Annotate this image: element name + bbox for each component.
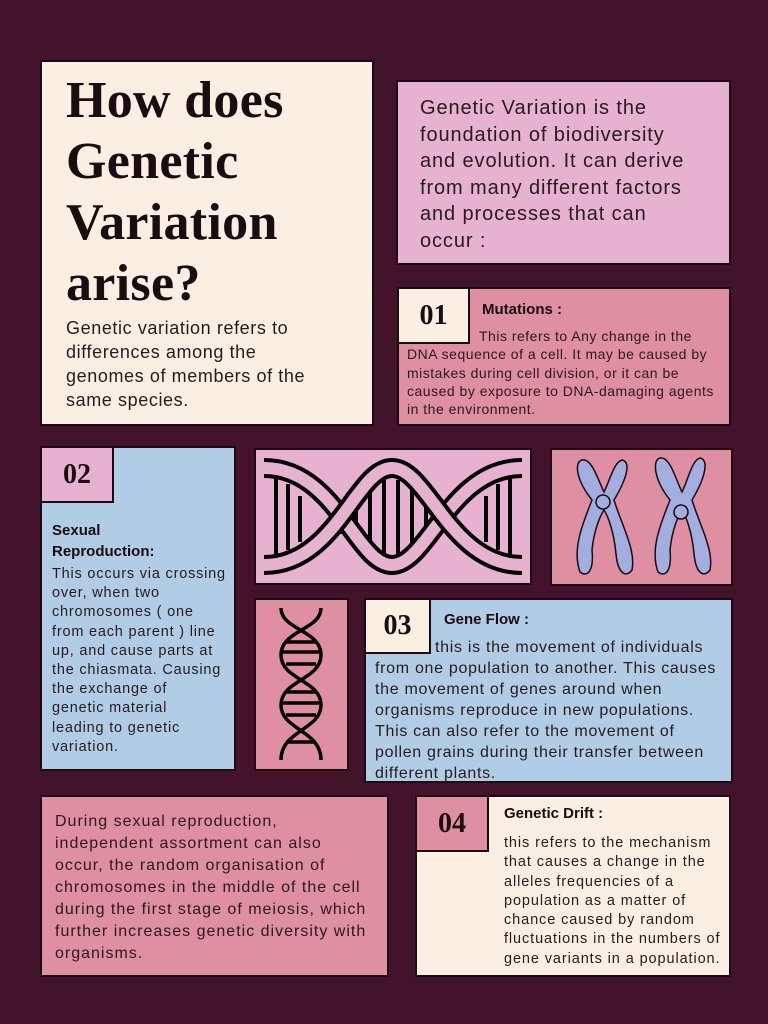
text: genetic drift: population as a matter of [504, 893, 686, 909]
number 02: 02 [63, 458, 91, 490]
panel: intro: occur : [420, 230, 486, 252]
definition text [66, 318, 305, 410]
panel: 01 mutations [397, 287, 731, 426]
number 03: 03 [384, 610, 412, 641]
text: sexual reproduction: This occurs via crossing [52, 566, 226, 582]
text: sexual reproduction: leading to genetic [52, 720, 180, 736]
text: genetic drift: gene variants in a population. [504, 951, 720, 967]
text: sexual reproduction: the exchange of [52, 681, 167, 697]
heading: sexual reproduction [52, 522, 154, 560]
panel: independent assortment: occur, the random organisation of [55, 857, 325, 874]
panel: independent assortment: chromosomes in the middle of the cell [55, 879, 361, 896]
text: mutations: caused by exposure to DNA-damaging agents [407, 383, 714, 399]
text: mutations: in the environment. [407, 401, 536, 417]
text: gene flow: different plants. [375, 765, 496, 782]
text: gene flow: the movement of genes around when [375, 681, 662, 698]
number 01: 01 [420, 300, 448, 330]
text: sexual reproduction: variation. [52, 739, 119, 755]
panel: intro: and evolution. It can derive [420, 150, 684, 172]
panel: intro: from many different factors [420, 176, 682, 198]
text: mutations: DNA sequence of a cell. It may be caused by [407, 346, 707, 362]
text: genetic drift: that causes a change in the [504, 854, 706, 870]
panel: intro [396, 80, 731, 265]
title: How does [66, 72, 284, 129]
number 04: 04 [438, 808, 466, 838]
number 03 [364, 598, 431, 654]
icon: vertical DNA [254, 598, 349, 771]
heading: sexual reproduction: Sexual [52, 522, 100, 539]
text: genetic drift: this refers to the mechanism [504, 835, 711, 851]
text: sexual reproduction: from each parent ) line [52, 624, 215, 640]
title [66, 72, 284, 312]
heading: sexual reproduction: Reproduction: [52, 543, 154, 560]
text: sexual reproduction: genetic material [52, 700, 167, 716]
panel: title [40, 60, 374, 426]
text: gene flow: this is the movement of individuals [435, 639, 703, 656]
panel: 02 sexual reproduction [40, 446, 236, 771]
heading: genetic drift: Genetic Drift : [504, 805, 603, 822]
text: gene flow: from one population to another. This causes [375, 660, 716, 677]
text: mutations [407, 328, 714, 417]
definition text: Genetic variation refers to [66, 318, 288, 338]
panel: independent assortment: further increases genetic diversity with [55, 923, 366, 940]
text: sexual reproduction: the chiasmata. Causing [52, 662, 221, 678]
text: gene flow [375, 639, 716, 782]
text: genetic drift [504, 835, 720, 967]
text: sexual reproduction: up, and cause parts at [52, 643, 213, 659]
heading: gene flow: Gene Flow : [444, 611, 529, 628]
icon: horizontal DNA [254, 448, 532, 585]
text: sexual reproduction: over, when two [52, 585, 160, 601]
title: Genetic [66, 133, 238, 190]
text: sexual reproduction: chromosomes ( one [52, 604, 194, 620]
icon: chromosomes [550, 448, 733, 586]
text: gene flow: organisms reproduce in new populations. [375, 702, 694, 719]
panel: intro: Genetic Variation is the [420, 97, 647, 119]
number 04 [415, 795, 489, 852]
panel: independent assortment: During sexual reproduction, [55, 813, 278, 830]
definition text: same species. [66, 390, 189, 410]
text: mutations: This refers to Any change in the [479, 328, 692, 344]
text: genetic drift: chance caused by random [504, 912, 695, 928]
panel: intro: and processes that can [420, 203, 647, 225]
number 02 [40, 446, 114, 503]
panel: independent assortment [40, 795, 389, 977]
definition text: differences among the [66, 342, 256, 362]
title: arise? [66, 255, 201, 312]
panel: independent assortment: organisms. [55, 945, 143, 962]
panel: independent assortment: during the first stage of meiosis, which [55, 901, 366, 918]
panel: 03 gene flow [364, 598, 733, 783]
title: Variation [66, 194, 278, 251]
panel: 04 genetic drift [415, 795, 731, 977]
number 01 [397, 287, 470, 344]
heading: mutations: Mutations : [482, 301, 562, 318]
panel: intro: foundation of biodiversity [420, 124, 665, 146]
panel: independent assortment: independent assortment can also [55, 835, 322, 852]
text: sexual reproduction [52, 566, 226, 755]
text: mutations: mistakes during cell division, or it can be [407, 365, 679, 381]
text: gene flow: This can also refer to the movement of [375, 723, 675, 740]
text: genetic drift: alleles frequencies of a [504, 874, 674, 890]
definition text: genomes of members of the [66, 366, 305, 386]
text: genetic drift: fluctuations in the numbers of [504, 931, 720, 947]
text: gene flow: pollen grains during their transfer between [375, 744, 704, 761]
